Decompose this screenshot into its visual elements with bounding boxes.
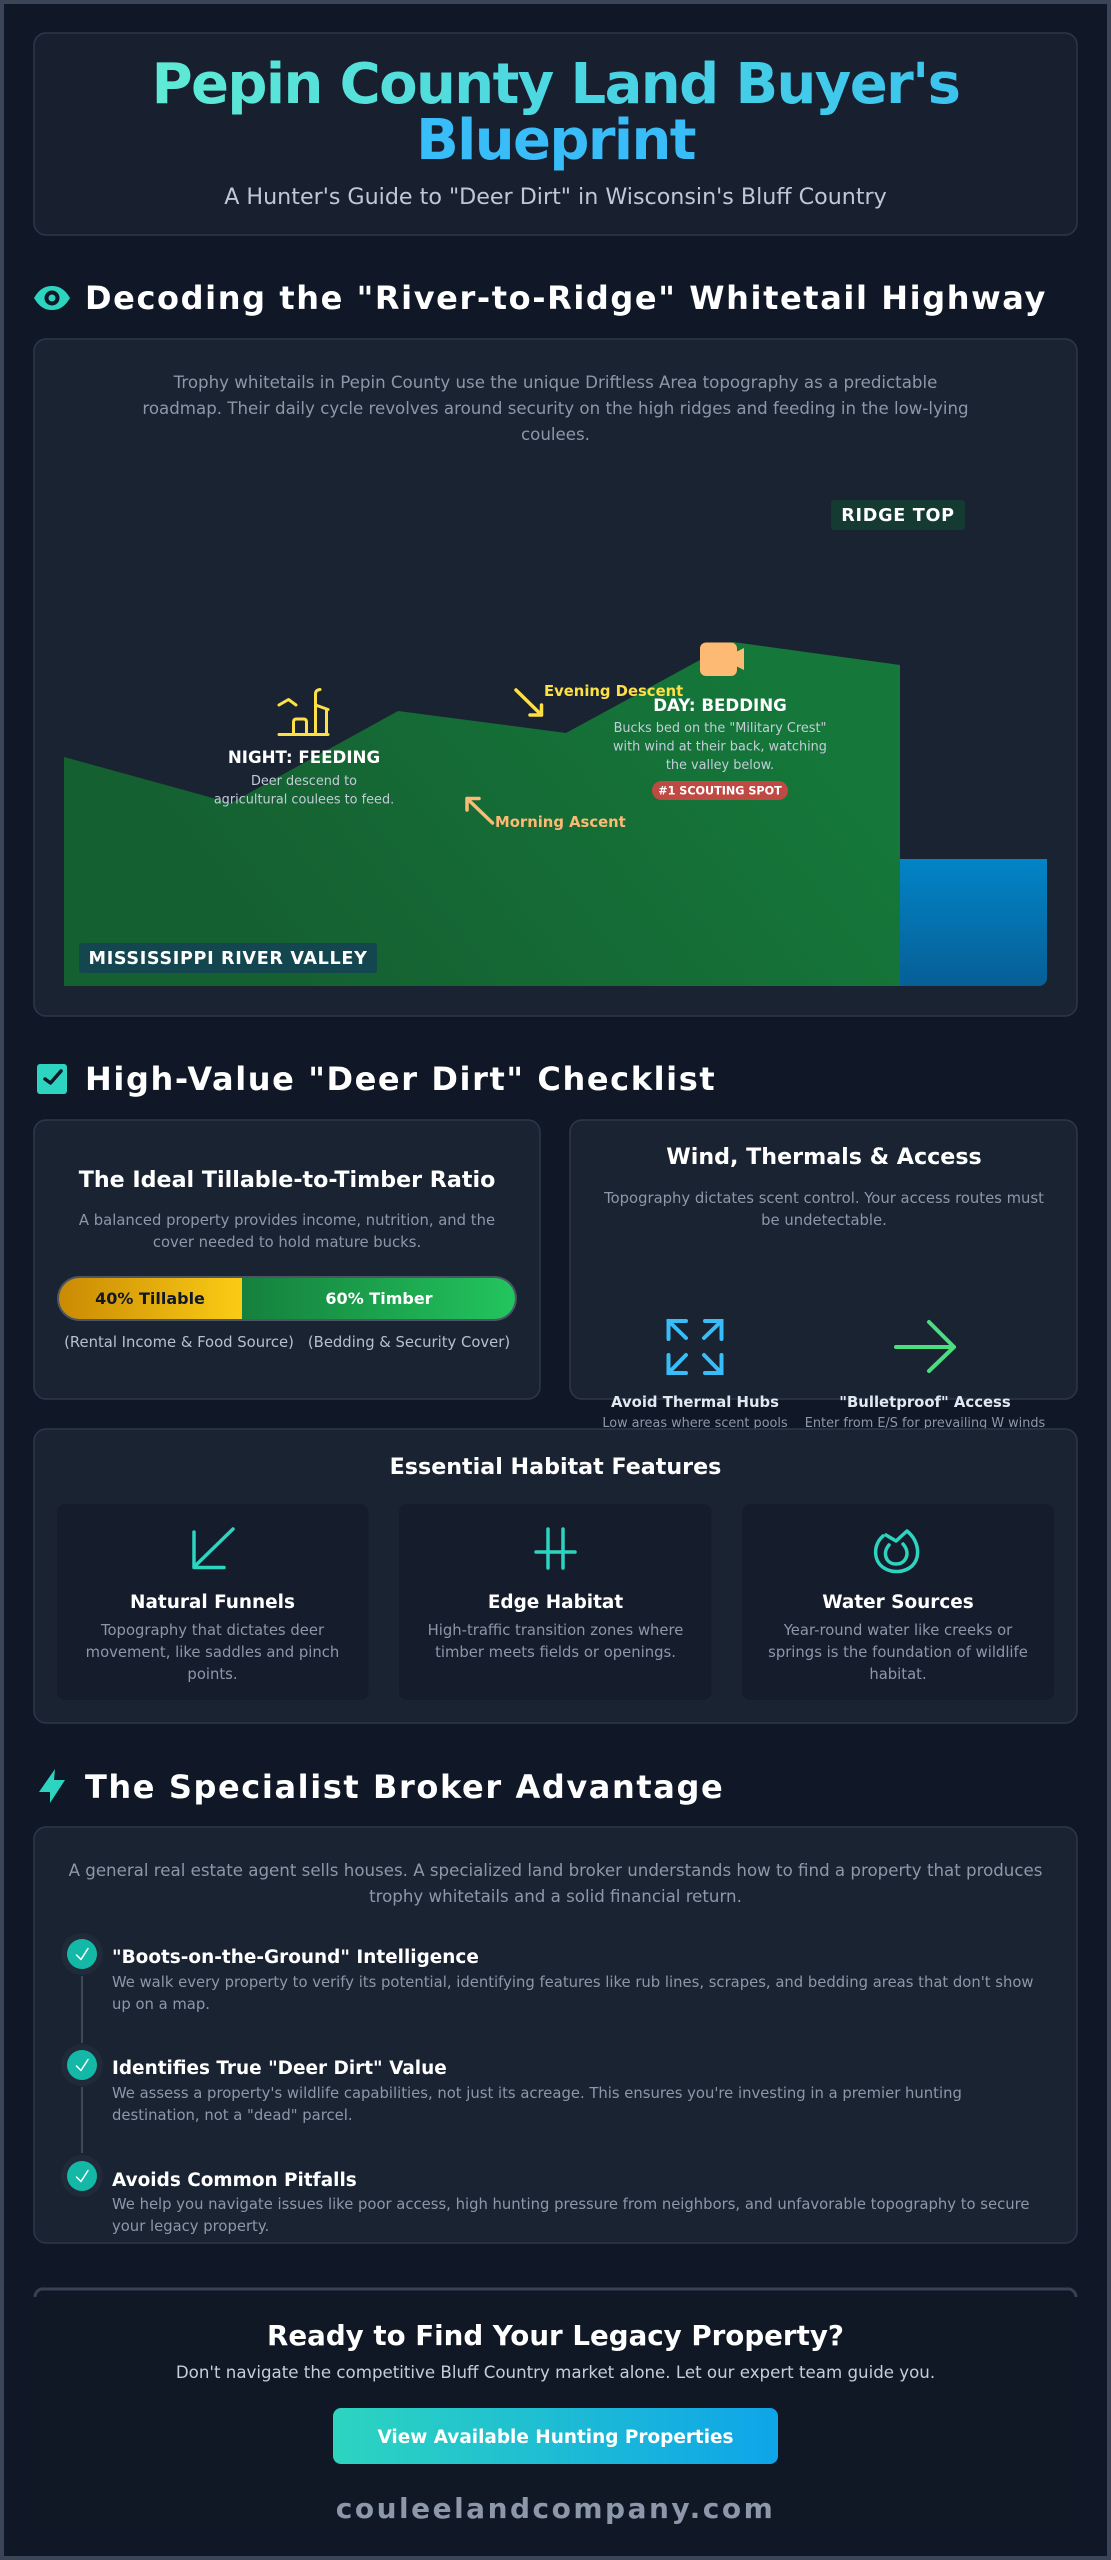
night feeding text: Deer descend to bbox=[251, 774, 357, 789]
timeline connectors bbox=[81, 1976, 83, 2153]
button: View Available Hunting Properties bbox=[377, 2427, 734, 2448]
title: Pepin County Land Buyer's bbox=[152, 52, 959, 117]
ratio bar: 40% Tillable bbox=[95, 1289, 205, 1308]
intro text bbox=[69, 1861, 1042, 1906]
day bedding text: Bucks bed on the "Military Crest" bbox=[614, 721, 826, 736]
label: river valley: MISSISSIPPI RIVER VALLEY bbox=[89, 949, 367, 969]
panel: wind thermals access: Wind, Thermals & Access bbox=[666, 1144, 982, 1170]
feature: natural funnels: Natural Funnels bbox=[130, 1592, 295, 1613]
item: deer dirt value: We assess a property's wildlife capabilities, not just its acreage. This ensures you're investing in a premier hunting bbox=[112, 2085, 962, 2102]
panel: header bbox=[34, 33, 1077, 235]
section heading: broker advantage: The Specialist Broker Advantage bbox=[85, 1768, 724, 1806]
day bedding text bbox=[613, 696, 827, 773]
icon: checkbox bbox=[37, 1064, 67, 1094]
thermal text bbox=[602, 1393, 788, 1431]
description: Topography dictates scent control. Your access routes must bbox=[603, 1190, 1044, 1207]
label: ridge top bbox=[831, 500, 965, 530]
night feeding text: NIGHT: FEEDING bbox=[228, 748, 380, 767]
feature: water sources: Year-round water like creeks or bbox=[783, 1622, 1013, 1639]
item: common pitfalls bbox=[61, 2155, 1030, 2235]
icon: feeding bbox=[279, 690, 328, 734]
river bbox=[900, 859, 1047, 986]
arrow: morning ascent: Morning Ascent bbox=[495, 814, 626, 831]
day bedding text: DAY: BEDDING bbox=[653, 696, 787, 715]
panel: essential habitat features bbox=[34, 1429, 1077, 1723]
ratio bar bbox=[57, 1276, 517, 1321]
description: A balanced property provides income, nutrition, and the bbox=[79, 1212, 495, 1229]
item: boots on the ground: up on a map. bbox=[112, 1996, 210, 2013]
website: couleelandcompany.com bbox=[336, 2492, 775, 2525]
panel: river to ridge diagram bbox=[34, 339, 1077, 1016]
icon: trail camera bbox=[700, 642, 744, 676]
access text: Enter from E/S for prevailing W winds bbox=[805, 1416, 1045, 1431]
icon: access arrow bbox=[896, 1322, 954, 1371]
item: boots on the ground: We walk every property to verify its potential, identifying features like rub lines, scrapes, and bedding areas that don't show bbox=[112, 1974, 1034, 1991]
item: deer dirt value: Identifies True "Deer Dirt" Value bbox=[112, 2058, 447, 2079]
day bedding text: the valley below. bbox=[666, 758, 774, 773]
panel: wind thermals access bbox=[570, 1120, 1077, 1431]
title bbox=[152, 52, 959, 173]
panel: call to action: Ready to Find Your Legacy Property? bbox=[267, 2319, 844, 2352]
night feeding text: agricultural coulees to feed. bbox=[214, 792, 394, 808]
feature: natural funnels bbox=[57, 1504, 368, 1700]
intro text: Trophy whitetails in Pepin County use the unique Driftless Area topography as a predictable bbox=[173, 373, 937, 392]
arrow: morning ascent bbox=[467, 798, 626, 831]
thermal text: Low areas where scent pools bbox=[602, 1416, 788, 1431]
panel: call to action bbox=[34, 2289, 1077, 2530]
icon: thermal arrows bbox=[668, 1321, 722, 1373]
feature: natural funnels: points. bbox=[187, 1666, 238, 1683]
feature: natural funnels: Topography that dictates deer bbox=[100, 1622, 325, 1639]
ratio captions bbox=[64, 1334, 510, 1351]
intro text: trophy whitetails and a solid financial return. bbox=[369, 1887, 742, 1906]
item: common pitfalls: Avoids Common Pitfalls bbox=[112, 2170, 357, 2191]
item: boots on the ground: "Boots-on-the-Ground" Intelligence bbox=[112, 1947, 479, 1968]
access text: "Bulletproof" Access bbox=[839, 1393, 1011, 1411]
description: cover needed to hold mature bucks. bbox=[153, 1234, 421, 1251]
access text bbox=[805, 1393, 1045, 1431]
arrow: evening descent: Evening Descent bbox=[544, 683, 683, 700]
feature: water sources bbox=[742, 1504, 1054, 1700]
panel: essential habitat features: Essential Habitat Features bbox=[390, 1454, 721, 1480]
panel: tillable to timber ratio: The Ideal Tillable-to-Timber Ratio bbox=[79, 1167, 495, 1193]
feature: edge habitat: Edge Habitat bbox=[488, 1592, 623, 1613]
panel: tillable to timber ratio bbox=[34, 1120, 540, 1399]
panel: broker advantage bbox=[34, 1827, 1077, 2243]
subtitle: A Hunter's Guide to "Deer Dirt" in Wisconsin's Bluff Country bbox=[224, 184, 887, 210]
intro text: roadmap. Their daily cycle revolves around security on the high ridges and feeding in the low-lying bbox=[142, 399, 969, 418]
feature: water sources: springs is the foundation of wildlife bbox=[768, 1644, 1028, 1661]
badge: scouting spot bbox=[652, 781, 788, 800]
intro text: coulees. bbox=[521, 425, 590, 444]
feature: edge habitat bbox=[399, 1504, 712, 1700]
item: deer dirt value bbox=[61, 2044, 962, 2124]
terrain bbox=[64, 642, 900, 986]
item: common pitfalls: We help you navigate issues like poor access, high hunting pressure from neighbors, and unfavorable topography to secure bbox=[112, 2196, 1030, 2213]
arrow: evening descent bbox=[516, 683, 683, 715]
thermal text: Avoid Thermal Hubs bbox=[611, 1393, 779, 1411]
label: ridge top: RIDGE TOP bbox=[841, 506, 955, 526]
feature: edge habitat: timber meets fields or openings. bbox=[435, 1644, 676, 1661]
description bbox=[603, 1190, 1044, 1229]
badge: scouting spot: #1 SCOUTING SPOT bbox=[658, 784, 782, 798]
ratio bar: 60% Timber bbox=[325, 1289, 433, 1308]
icon: lightning bolt bbox=[39, 1769, 65, 1803]
feature: edge habitat: High-traffic transition zones where bbox=[428, 1622, 683, 1639]
icon: eye bbox=[34, 286, 70, 310]
feature: natural funnels: movement, like saddles and pinch bbox=[86, 1644, 339, 1661]
panel: call to action: Don't navigate the competitive Bluff Country market alone. Let our expert team guide you. bbox=[176, 2363, 935, 2382]
item: boots on the ground bbox=[61, 1933, 1034, 2013]
ratio captions: (Rental Income & Food Source) bbox=[64, 1334, 294, 1351]
description bbox=[79, 1212, 495, 1251]
day bedding text: with wind at their back, watching bbox=[613, 740, 827, 754]
night feeding text bbox=[214, 748, 394, 808]
intro text bbox=[142, 373, 969, 444]
intro text: A general real estate agent sells houses. A specialized land broker understands how to find a property that produces bbox=[69, 1861, 1042, 1880]
description: be undetectable. bbox=[761, 1212, 887, 1229]
item: deer dirt value: destination, not a "dead" parcel. bbox=[112, 2107, 353, 2124]
section heading: checklist: High-Value "Deer Dirt" Checklist bbox=[85, 1060, 716, 1098]
title: Blueprint bbox=[416, 108, 696, 173]
button bbox=[333, 2408, 778, 2464]
ratio captions: (Bedding & Security Cover) bbox=[308, 1334, 510, 1351]
feature: water sources: Water Sources bbox=[822, 1592, 974, 1613]
section heading: river to ridge: Decoding the "River-to-Ridge" Whitetail Highway bbox=[85, 279, 1047, 317]
item: common pitfalls: your legacy property. bbox=[112, 2218, 269, 2235]
feature: water sources: habitat. bbox=[869, 1666, 927, 1683]
label: river valley bbox=[79, 943, 377, 973]
